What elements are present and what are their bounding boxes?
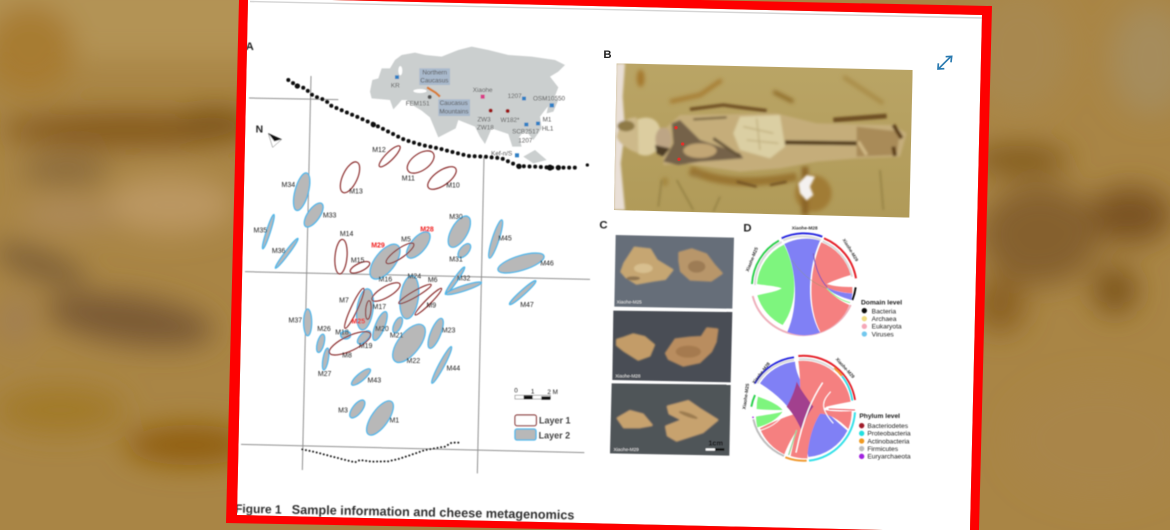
layer 1 graves	[326, 143, 460, 360]
grave labels: M22	[407, 358, 420, 365]
map labels: W182*	[500, 117, 520, 124]
grave labels: M12	[372, 147, 386, 154]
grave labels: M45	[498, 235, 512, 242]
grave labels: M24	[408, 274, 421, 281]
white fragment on cloth	[798, 175, 815, 201]
panel letter D: D	[743, 223, 752, 235]
legend: phylum level: Euryarchaeota	[867, 454, 911, 461]
grave labels: M28	[420, 227, 434, 234]
panel B: mummy photograph	[603, 49, 952, 220]
grave labels: M36	[272, 248, 286, 255]
grave labels: M18	[335, 330, 349, 337]
map labels: ZW3	[477, 116, 491, 123]
header rule	[250, 2, 982, 18]
grave labels: M9	[426, 303, 436, 310]
north arrow: N	[256, 125, 263, 136]
map labels: 1207	[518, 137, 533, 144]
legend: layers: Layer 1	[539, 416, 570, 426]
red frame	[226, 0, 992, 530]
grave labels: M33	[323, 213, 337, 220]
north coastline dotted line	[288, 80, 589, 171]
scale bar	[514, 388, 558, 400]
grave labels: M6	[428, 277, 438, 284]
grave labels: M20	[375, 326, 389, 333]
white slide page	[237, 0, 982, 530]
scale bar: 0	[514, 388, 518, 395]
legend: domain level: Viruses	[872, 331, 894, 338]
map labels: Northern	[422, 69, 447, 76]
legend: phylum level: Bacteriodetes	[867, 423, 909, 430]
map labels: ZW18	[477, 124, 494, 131]
figure caption: Figure 1	[235, 502, 282, 517]
legend: phylum level: Actinobacteria	[867, 438, 910, 445]
grave labels: M13	[349, 189, 363, 196]
map label boxes	[419, 68, 450, 85]
grave labels: M37	[289, 317, 302, 324]
panels C and D	[599, 219, 911, 461]
chord diagram: domain level: Xiaohe-M28	[792, 226, 818, 231]
map labels: HL1	[542, 125, 554, 132]
map labels: SCB2517	[512, 129, 540, 136]
grave labels: M16	[379, 276, 392, 283]
chord diagram: phylum level	[742, 356, 856, 461]
grave labels: M17	[373, 304, 386, 311]
grave labels: M31	[449, 257, 463, 264]
chord diagram: phylum level: Xiaohe-M25	[742, 383, 750, 410]
grave labels	[254, 147, 554, 425]
cheese photo: Xiaohe-M28	[612, 311, 732, 382]
grave labels: M11	[402, 175, 415, 182]
panel A: burial site map	[235, 41, 590, 522]
grave labels: M3	[338, 408, 348, 415]
legend: domain level	[861, 300, 902, 338]
south coastline dotted line	[302, 443, 458, 462]
inset map of Eurasia	[370, 47, 565, 163]
map labels: Caucasus	[420, 78, 448, 85]
grave labels: M15	[351, 258, 365, 265]
layer 2 graves	[261, 171, 546, 439]
legend: domain level: Bacteria	[872, 308, 896, 315]
north arrow	[256, 125, 282, 147]
panel letter B: B	[603, 49, 612, 61]
grave labels: M44	[447, 365, 460, 372]
scale bar: 2 M	[547, 389, 558, 396]
chord diagram: phylum level: Xiaohe-M28	[751, 361, 771, 385]
cheese photo: Xiaohe-M25	[614, 235, 734, 309]
map labels: FEM151	[406, 100, 430, 107]
legend: layers	[515, 415, 570, 440]
cheese photo: Xiaohe-M29	[610, 383, 731, 456]
grave labels: M35	[254, 227, 267, 234]
map labels: 1207	[508, 93, 522, 100]
chord diagram: domain level: Xiaohe-M29	[842, 238, 860, 263]
grave labels: M21	[390, 332, 404, 339]
legend: layers: Layer 2	[539, 430, 570, 440]
chord diagram: phylum level: Xiaohe-M29	[835, 357, 856, 380]
cheese photo: Xiaohe-M28: Xiaohe-M28	[615, 374, 641, 379]
grave labels: M26	[317, 326, 331, 333]
cheese photo: Xiaohe-M29: Xiaohe-M29	[614, 447, 639, 452]
map labels: M1	[543, 117, 552, 124]
legend: phylum level	[859, 413, 911, 461]
map labels: Caucasus	[440, 100, 468, 107]
grave labels: M34	[282, 182, 295, 189]
grave labels: M29	[371, 242, 385, 249]
map labels: Xiaohe	[473, 87, 493, 94]
red sampling dots	[674, 126, 678, 129]
panel letter C: C	[599, 219, 608, 231]
photo of mummy on cloth	[610, 60, 917, 220]
legend: domain level: Archaea	[872, 316, 897, 323]
grave labels: M19	[359, 343, 373, 350]
survey grid lines	[241, 76, 590, 473]
grave labels: M7	[339, 298, 349, 305]
legend: domain level: Eukaryota	[872, 324, 902, 331]
sample site dots	[395, 75, 554, 157]
map labels: Mountains	[439, 109, 469, 116]
grave labels: M47	[520, 302, 534, 309]
grave labels: M8	[342, 353, 352, 360]
grave labels: M23	[442, 328, 456, 335]
map labels: OSM10550	[533, 95, 565, 102]
grave labels: M30	[449, 214, 463, 221]
grave labels: M46	[540, 261, 554, 268]
chord diagram: domain level	[745, 226, 860, 335]
legend: phylum level: Firmicutes	[867, 446, 899, 453]
cheese photo: Xiaohe-M25: Xiaohe-M25	[617, 299, 642, 304]
map labels	[391, 69, 565, 157]
chord diagram: domain level: Xiaohe-M25	[745, 246, 759, 272]
grave labels: M25	[352, 318, 365, 325]
scale bar: 1	[531, 389, 535, 396]
figure caption: Sample information and cheese metagenomics	[292, 503, 575, 522]
legend: phylum level: Phylum level	[859, 413, 900, 420]
icon: expand arrows	[938, 56, 952, 69]
grave labels: M43	[368, 378, 381, 385]
caucasus range marker	[427, 87, 440, 97]
panel letter A: A	[246, 41, 254, 53]
grave labels: M5	[401, 237, 411, 244]
legend: phylum level: Proteobacteria	[867, 431, 911, 438]
legend: domain level: Domain level	[861, 300, 902, 307]
grave labels: M14	[340, 231, 354, 238]
grave labels: M27	[318, 371, 332, 378]
grave labels: M10	[446, 183, 460, 190]
grave labels: M32	[457, 275, 471, 282]
map labels: KR	[391, 83, 400, 90]
map labels: Kef-n/S	[491, 150, 512, 157]
scale bar 1cm: 1cm	[708, 438, 723, 447]
grave labels: M1	[389, 418, 399, 425]
